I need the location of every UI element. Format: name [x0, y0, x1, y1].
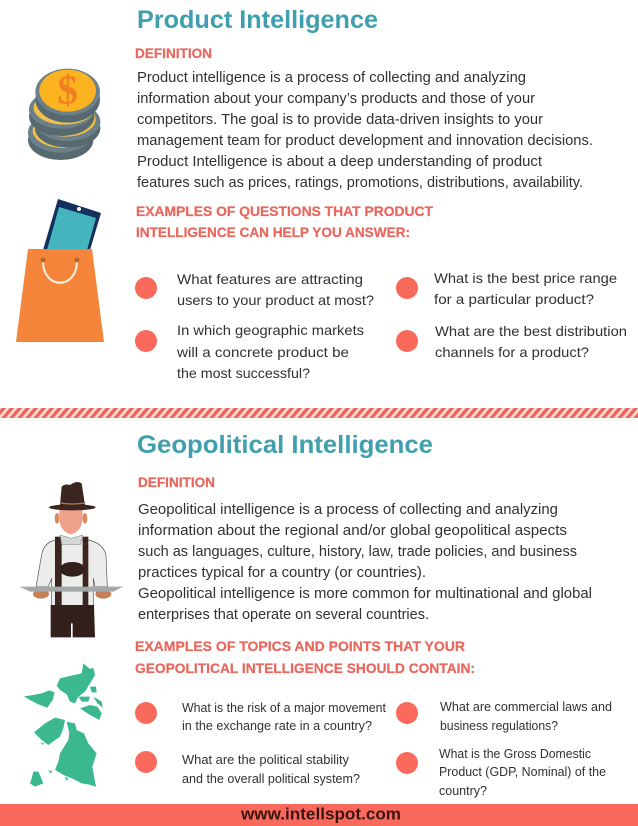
- text block: commercial laws topic: What are commercial laws and: [440, 700, 612, 714]
- title: Geopolitical Intelligence: Geopolitical Intelligence: [137, 431, 433, 459]
- text block: geopolitical intelligence definition: enterprises that operate on several countries.: [138, 607, 429, 623]
- heading: definition: DEFINITION: [135, 45, 212, 61]
- text block: geopolitical intelligence definition: [138, 502, 592, 623]
- text block: distribution channels question: [435, 323, 627, 360]
- heading: geopolitical topics: [135, 638, 475, 676]
- text block: geographic markets question: will a concrete product be: [176, 344, 349, 360]
- text block: price range question: [434, 270, 617, 307]
- text block: GDP topic: What is the Gross Domestic: [439, 747, 591, 761]
- text block: geopolitical intelligence definition: Geopolitical intelligence is more common for multinational and global: [138, 586, 592, 602]
- heading: product intelligence questions: [136, 203, 433, 240]
- text block: GDP topic: [439, 747, 606, 798]
- footer bar with website: www.intellspot.com: [240, 806, 401, 824]
- text block: distribution channels question: channels for a product?: [435, 344, 589, 360]
- bullet markers: product questions: [135, 277, 418, 352]
- text block: political stability topic: [182, 753, 360, 786]
- icon: man in hat holding tray: [19, 482, 123, 637]
- text block: commercial laws topic: [440, 700, 612, 733]
- bullet markers: geopolitical topics: [135, 702, 418, 774]
- text block: attracting features question: What features are attracting: [177, 271, 363, 287]
- text block: product intelligence definition: Product Intelligence is about a deep understanding of product: [137, 154, 542, 170]
- text block: attracting features question: [177, 271, 374, 308]
- icon: shopping bag with phone: [16, 199, 104, 342]
- text block: political stability topic: and the overall political system?: [182, 772, 360, 786]
- text block: product intelligence definition: features such as prices, ratings, promotions, distributions, availability.: [137, 175, 583, 191]
- text block: product intelligence definition: information about your company’s products and those of your: [137, 91, 535, 107]
- text block: exchange rate topic: in the exchange rate in a country?: [182, 719, 372, 733]
- text block: product intelligence definition: [137, 70, 593, 191]
- text block: price range question: What is the best price range: [434, 270, 617, 286]
- text block: geopolitical intelligence definition: Geopolitical intelligence is a process of collecting and analyzing: [138, 502, 558, 518]
- text block: attracting features question: users to your product at most?: [177, 292, 374, 308]
- icon: coin stack: [28, 67, 100, 160]
- text block: geographic markets question: In which geographic markets: [177, 322, 364, 338]
- text block: geopolitical intelligence definition: practices typical for a country (or countries).: [138, 565, 426, 581]
- heading: product intelligence questions: INTELLIGENCE CAN HELP YOU ANSWER:: [136, 224, 410, 240]
- heading: geopolitical topics: GEOPOLITICAL INTELLIGENCE SHOULD CONTAIN:: [135, 660, 475, 676]
- text block: product intelligence definition: management team for product development and innovation decisions.: [137, 133, 593, 149]
- text block: product intelligence definition: competitors. The goal is to provide data-driven insights to your: [137, 112, 543, 128]
- text block: geopolitical intelligence definition: information about the regional and/or global geopolitical aspects: [138, 523, 567, 539]
- text block: GDP topic: Product (GDP, Nominal) of the: [439, 765, 606, 779]
- text block: commercial laws topic: business regulations?: [440, 719, 558, 733]
- text block: exchange rate topic: [182, 701, 387, 733]
- text block: geopolitical intelligence definition: such as languages, culture, history, law, trade policies, and business: [138, 544, 577, 560]
- text block: geographic markets question: the most successful?: [177, 365, 310, 381]
- heading: geopolitical topics: EXAMPLES OF TOPICS AND POINTS THAT YOUR: [135, 638, 465, 654]
- icon: coin stack: $: [57, 67, 78, 113]
- text block: geographic markets question: [176, 322, 364, 381]
- text block: price range question: for a particular product?: [434, 291, 594, 307]
- heading: product intelligence questions: EXAMPLES OF QUESTIONS THAT PRODUCT: [136, 203, 433, 219]
- title: Product Intelligence: Product Intelligence: [137, 6, 378, 34]
- text block: GDP topic: country?: [439, 784, 487, 798]
- footer bar with website: [0, 804, 638, 826]
- text block: product intelligence definition: Product intelligence is a process of collecting and analyzing: [137, 70, 526, 86]
- icon: teal world map: [24, 663, 103, 787]
- text block: political stability topic: What are the political stability: [182, 753, 350, 767]
- heading: definition: DEFINITION: [138, 474, 215, 490]
- text block: exchange rate topic: What is the risk of a major movement: [182, 701, 387, 715]
- text block: distribution channels question: What are the best distribution: [435, 323, 627, 339]
